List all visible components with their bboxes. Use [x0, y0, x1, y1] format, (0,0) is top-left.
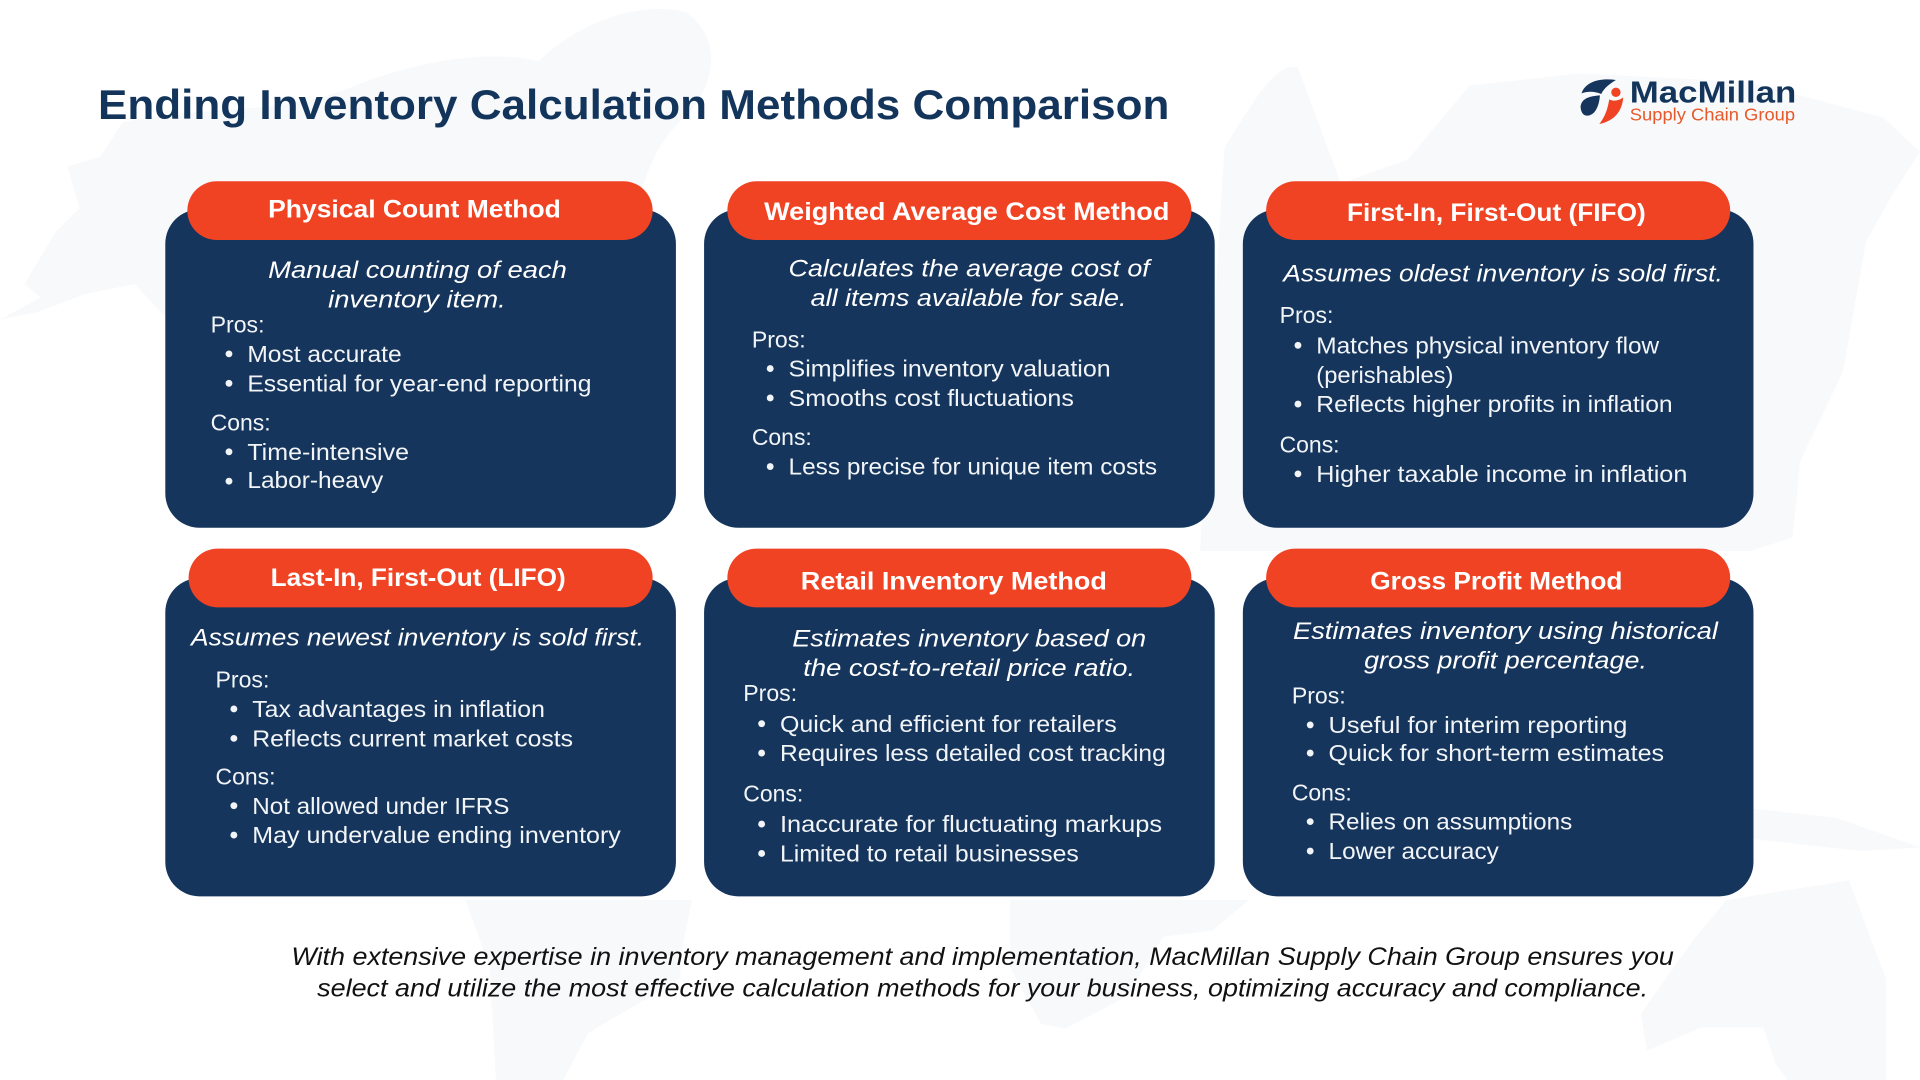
cons: Cons: [216, 763, 276, 789]
pros: Matches physical inventory flow [1316, 332, 1660, 358]
cons: Time-intensive [247, 439, 409, 465]
cons: Labor-heavy [247, 467, 384, 493]
cons [1280, 432, 1687, 487]
pros: Reflects higher profits in inflation [1316, 391, 1673, 417]
pros: Pros: [211, 312, 264, 338]
description: gross profit percentage. [1364, 648, 1647, 675]
description: Estimates inventory using historical [1293, 618, 1719, 645]
pros: Smooths cost fluctuations [789, 385, 1074, 411]
pros: Simplifies inventory valuation [789, 356, 1111, 382]
panel: Gross Profit Method [1243, 549, 1753, 896]
pros: Useful for interim reporting [1329, 712, 1627, 738]
footer statement: With extensive expertise in inventory management and implementation, MacMillan Supply Chain Group ensures you [291, 943, 1674, 971]
pros: Requires less detailed cost tracking [780, 740, 1166, 766]
pros: Tax advantages in inflation [252, 696, 545, 722]
pros: Pros: [1292, 683, 1346, 709]
description: Calculates the average cost of [789, 256, 1152, 283]
icon: logo mark [1581, 79, 1623, 124]
panel: Last-In, First-Out (LIFO) [165, 549, 676, 896]
description: Assumes newest inventory is sold first. [189, 624, 644, 651]
title: Ending Inventory Calculation Methods Comparison [98, 81, 1169, 128]
pros: Pros: [216, 667, 269, 693]
panel: First-In, First-Out (FIFO) [1243, 181, 1753, 528]
cons [1292, 779, 1572, 864]
pros [211, 312, 591, 396]
cons: May undervalue ending inventory [252, 822, 622, 848]
cons: Relies on assumptions [1329, 809, 1572, 835]
heading: Physical Count Method [268, 195, 561, 223]
cons: Less precise for unique item costs [789, 454, 1157, 480]
cons: Limited to retail businesses [780, 841, 1079, 867]
footer statement [291, 943, 1674, 1003]
description: Estimates inventory based on [792, 626, 1146, 653]
pros [1280, 302, 1673, 417]
cons: Cons: [752, 424, 812, 450]
heading: First-In, First-Out (FIFO) [1347, 199, 1646, 227]
cons: Not allowed under IFRS [252, 793, 509, 819]
cons: Cons: [211, 410, 271, 436]
cons: Lower accuracy [1329, 838, 1499, 864]
pros [743, 680, 1166, 766]
pros [1292, 683, 1664, 766]
pros: Quick and efficient for retailers [780, 711, 1117, 737]
description [1293, 618, 1719, 675]
pros: Reflects current market costs [252, 725, 573, 751]
panel: Physical Count Method [165, 181, 676, 528]
description [789, 256, 1152, 312]
description [792, 626, 1146, 682]
pros: Most accurate [247, 341, 402, 367]
cons: Inaccurate for fluctuating markups [780, 811, 1162, 837]
logo [1581, 75, 1796, 125]
logo name: MacMillan [1630, 75, 1796, 109]
cons: Cons: [1280, 432, 1340, 458]
description: Assumes oldest inventory is sold first. [1281, 261, 1723, 288]
heading: Last-In, First-Out (LIFO) [271, 564, 566, 592]
pros: (perishables) [1316, 362, 1453, 388]
description: Manual counting of each [268, 257, 567, 284]
cons [752, 424, 1157, 480]
cons [216, 763, 622, 848]
cons: Cons: [1292, 779, 1352, 805]
pros [216, 667, 573, 751]
pros [752, 326, 1111, 411]
footer statement: select and utilize the most effective calculation methods for your business, optimizing accuracy and compliance. [317, 975, 1648, 1003]
description: all items available for sale. [811, 285, 1127, 312]
pros: Pros: [752, 326, 806, 352]
description [268, 257, 567, 313]
heading: Weighted Average Cost Method [764, 198, 1169, 226]
logo tagline: Supply Chain Group [1630, 105, 1795, 125]
description: inventory item. [328, 286, 506, 313]
pros: Essential for year-end reporting [247, 370, 591, 396]
pros: Quick for short-term estimates [1329, 740, 1664, 766]
heading: Gross Profit Method [1370, 568, 1622, 596]
heading: Retail Inventory Method [801, 568, 1107, 596]
cons: Higher taxable income in inflation [1316, 461, 1687, 487]
cons: Cons: [743, 781, 803, 807]
cons [743, 781, 1162, 867]
panel: Weighted Average Cost Method [704, 181, 1215, 528]
cons [211, 410, 409, 493]
description: the cost-to-retail price ratio. [803, 655, 1135, 682]
pros: Pros: [743, 680, 797, 706]
panel: Retail Inventory Method [704, 549, 1215, 896]
pros: Pros: [1280, 302, 1333, 328]
